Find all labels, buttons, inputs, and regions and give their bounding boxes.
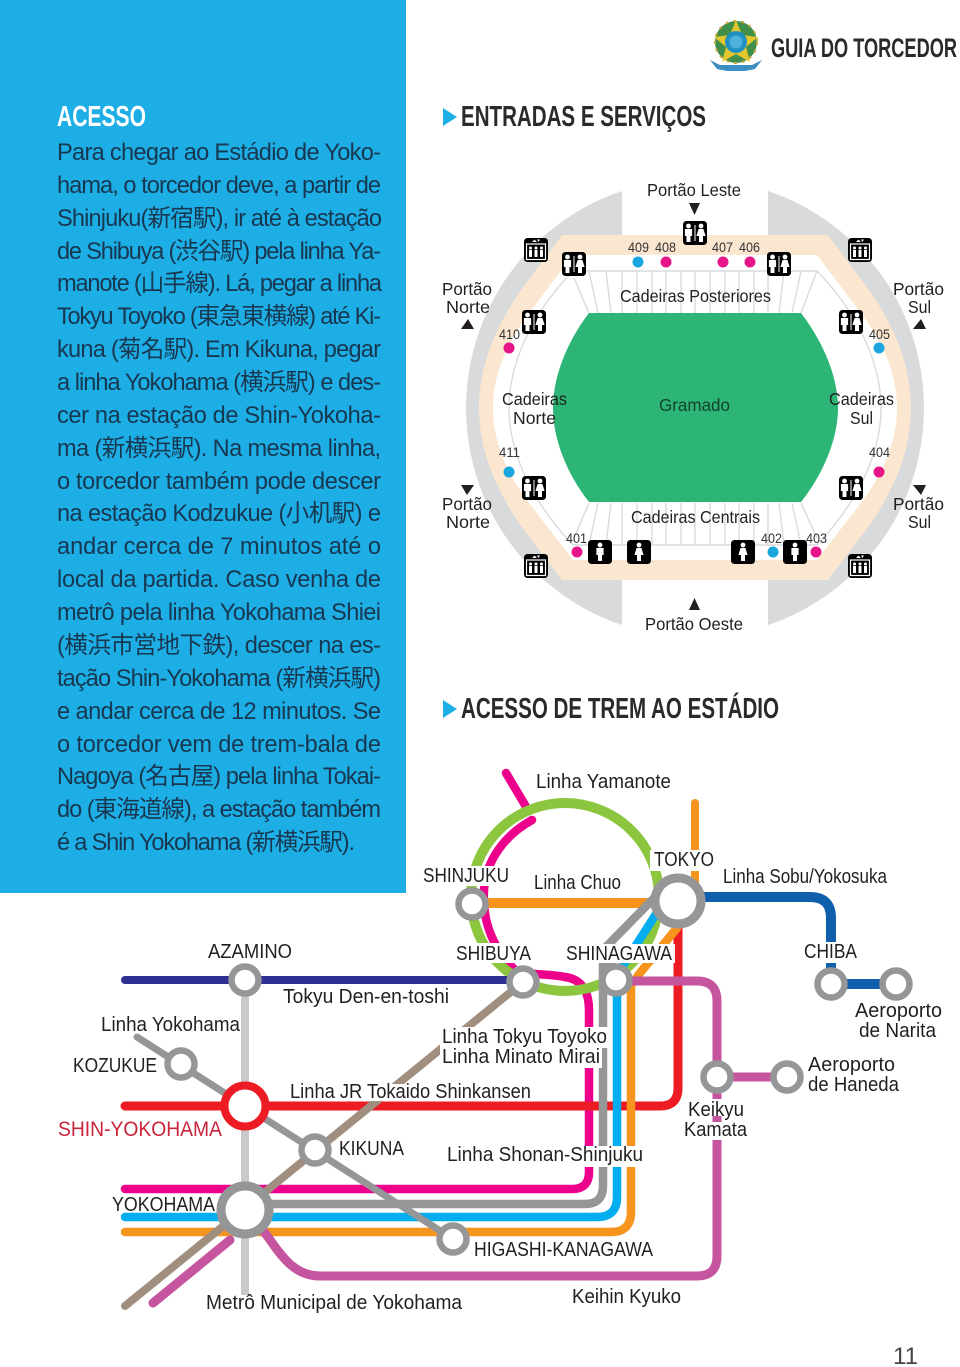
map labels: SHIN-YOKOHAMA [58, 1118, 222, 1141]
label: cadeiras norte [502, 389, 567, 428]
map labels: Tokyu Den-en-toshi [283, 986, 449, 1008]
stadium map [442, 179, 944, 637]
line: yamanote loop [471, 803, 659, 991]
text block: directions: hama, o torcedor deve, a partir de [57, 173, 381, 199]
map labels: Linha JR Tokaido Shinkansen [290, 1081, 531, 1103]
line: navy den-en-toshi [125, 976, 523, 984]
map labels: Linha Sobu/Yokosuka [723, 866, 888, 888]
gate: portão oeste [645, 598, 743, 634]
rail network map [58, 771, 942, 1314]
gate numbers: 406 [739, 240, 760, 255]
map labels: Linha Tokyu Toyoko [442, 1026, 607, 1048]
gate numbers: 403 [806, 531, 827, 546]
map labels: SHINJUKU [423, 865, 509, 887]
line: blue [125, 914, 656, 1217]
heading: acesso: ACESSO [57, 101, 146, 133]
map labels: Aeroporto [808, 1054, 895, 1076]
text block: directions: o torcedor também pode descer [57, 469, 381, 495]
map labels: Linha Yokohama [101, 1014, 241, 1036]
label: cadeiras sul [829, 389, 894, 428]
gate: portão norte lower: Portão [442, 494, 492, 514]
line: red tokaido shinkansen [125, 915, 678, 1106]
map labels: Linha Shonan-Shinjuku [447, 1144, 643, 1166]
inner white area [493, 255, 897, 560]
gate: portão leste: Portão Leste [647, 180, 741, 200]
map labels [58, 771, 942, 1314]
text block: directions: Nagoya (名古屋) pela linha Tokai- [57, 763, 381, 790]
gate numbers: 410 [499, 327, 520, 342]
heading: acesso de trem ao estádio [443, 691, 779, 725]
label: cadeiras centrais: Cadeiras Centrais [631, 507, 760, 527]
text block: directions: e andar cerca de 12 minutos. Se [57, 699, 381, 725]
heading: entradas e serviços: ENTRADAS E SERVIÇOS [461, 101, 706, 133]
text block: directions: (横浜市営地下鉄), descer na es- [57, 632, 381, 659]
gate numbers: 409 [628, 240, 649, 255]
text block: directions: kuna (菊名駅). Em Kikuna, pegar [57, 336, 381, 363]
label: gramado: Gramado [659, 395, 730, 415]
gate: portão sul lower: Portão [893, 494, 944, 514]
map labels: de Narita [859, 1020, 937, 1042]
map labels: Linha Chuo [534, 872, 621, 894]
map labels: SHIBUYA [456, 943, 532, 965]
map labels: Kamata [684, 1119, 748, 1141]
label knockouts [110, 850, 860, 1212]
gate: portão norte lower [442, 485, 492, 532]
map labels: Linha Yamanote [536, 771, 671, 793]
line: magenta shonan-shinjuku [125, 773, 589, 1189]
gate numbers: 401 [566, 531, 587, 546]
text block: directions: manote (山手線). Lá, pegar a linha [57, 270, 383, 297]
gate: portão norte upper [442, 279, 492, 329]
line: yokohama [137, 1037, 453, 1239]
pitch [553, 313, 838, 502]
text block: directions: cer na estação de Shin-Yokoha- [57, 403, 381, 429]
outer grey ring [466, 179, 924, 637]
text block: directions [57, 140, 383, 856]
map labels: KIKUNA [339, 1138, 405, 1160]
service icons: elevators [524, 238, 872, 578]
label: cadeiras posteriores: Cadeiras Posteriores [620, 286, 771, 306]
gate: portão sul upper: Portão [893, 279, 944, 299]
text block: directions: do (東海道線), a estação também [57, 796, 381, 823]
map labels: de Haneda [808, 1074, 900, 1096]
text block: directions: andar cerca de 7 minutos até o [57, 534, 381, 560]
gate numbers: 411 [499, 445, 520, 460]
text block: directions: local da partida. Caso venha de [57, 567, 381, 593]
map labels: AZAMINO [208, 941, 292, 963]
gate numbers: 407 [712, 240, 733, 255]
station rings [168, 878, 910, 1252]
label: cadeiras sul: Sul [850, 408, 873, 428]
gate: portão sul lower: Sul [908, 512, 931, 532]
map labels: TOKYO [654, 849, 714, 871]
label: cadeiras norte: Norte [513, 408, 556, 428]
gate numbers: 404 [869, 445, 890, 460]
gate numbers [499, 240, 890, 546]
gate: portão norte lower: Norte [446, 512, 490, 532]
line: sobu yokosuka [690, 897, 896, 984]
line: metro municipal [241, 980, 249, 1295]
gate: portão norte upper: Portão [442, 279, 492, 299]
text block: directions: o torcedor vem de trem-bala de [57, 732, 381, 758]
line: orange north of tokyo [691, 803, 699, 885]
map labels: CHIBA [804, 941, 858, 963]
heading: entradas e serviços [443, 101, 706, 133]
beige concourse [479, 235, 911, 580]
map labels: HIGASHI-KANAGAWA [474, 1239, 654, 1261]
text block: directions: Tokyu Toyoko (東急東横線) até Ki- [57, 303, 381, 330]
gate numbers: 405 [869, 327, 890, 342]
panel: acesso text [0, 0, 406, 893]
text block: directions: Shinjuku(新宿駅), ir até à estação [57, 205, 382, 232]
map labels: KOZUKUE [73, 1055, 157, 1077]
text block: directions: de Shibuya (渋谷駅) pela linha Ya- [57, 238, 381, 265]
label: cadeiras norte: Cadeiras [502, 389, 567, 409]
map labels: Keikyu [688, 1099, 744, 1121]
line: grey [245, 892, 660, 1204]
map labels: YOKOHAMA [112, 1194, 216, 1216]
gate: portão leste [647, 180, 741, 215]
header: coat of arms and guide title [710, 20, 957, 71]
text block: directions: é a Shin Yokohama (新横浜駅). [57, 829, 355, 856]
gate: portão sul upper: Sul [908, 297, 931, 317]
heading: acesso de trem ao estádio: ACESSO DE TREM AO ESTÁDIO [461, 691, 779, 725]
map labels: SHINAGAWA [566, 943, 673, 965]
text block: directions: a linha Yokohama (横浜駅) e des- [57, 369, 381, 396]
line: keikyu [153, 981, 787, 1303]
text block: directions: metrô pela linha Yokohama Shiei [57, 600, 381, 626]
text block: directions: ma (新横浜駅). Na mesma linha, [57, 435, 381, 462]
gate numbers: 408 [655, 240, 676, 255]
text block: directions: tação Shin-Yokohama (新横浜駅) [57, 665, 381, 692]
icon: brazilian coat of arms [710, 20, 762, 71]
text block: directions: na estação Kodzukue (小机駅) e [57, 500, 381, 527]
label: cadeiras sul: Cadeiras [829, 389, 894, 409]
map labels: Keihin Kyuko [572, 1286, 681, 1308]
gate: portão sul lower [893, 485, 944, 532]
map labels: Linha Minato Mirai [442, 1046, 600, 1068]
service icons: restrooms [522, 221, 863, 564]
gate numbers: 402 [761, 531, 782, 546]
line: tokyu toyoko brown [125, 982, 523, 1306]
text block: directions: Para chegar ao Estádio de Yoko- [57, 140, 381, 166]
gate: portão sul upper [893, 279, 944, 329]
map labels: Metrô Municipal de Yokohama [206, 1292, 463, 1314]
gate: portão oeste: Portão Oeste [645, 614, 743, 634]
line: chuo orange [480, 898, 655, 908]
line: orange [125, 928, 677, 1232]
gate: portão norte upper: Norte [446, 297, 490, 317]
map labels: Aeroporto [855, 1000, 942, 1022]
gate markers: coloured dots [504, 256, 884, 558]
seating outline and radial lines [509, 271, 881, 545]
